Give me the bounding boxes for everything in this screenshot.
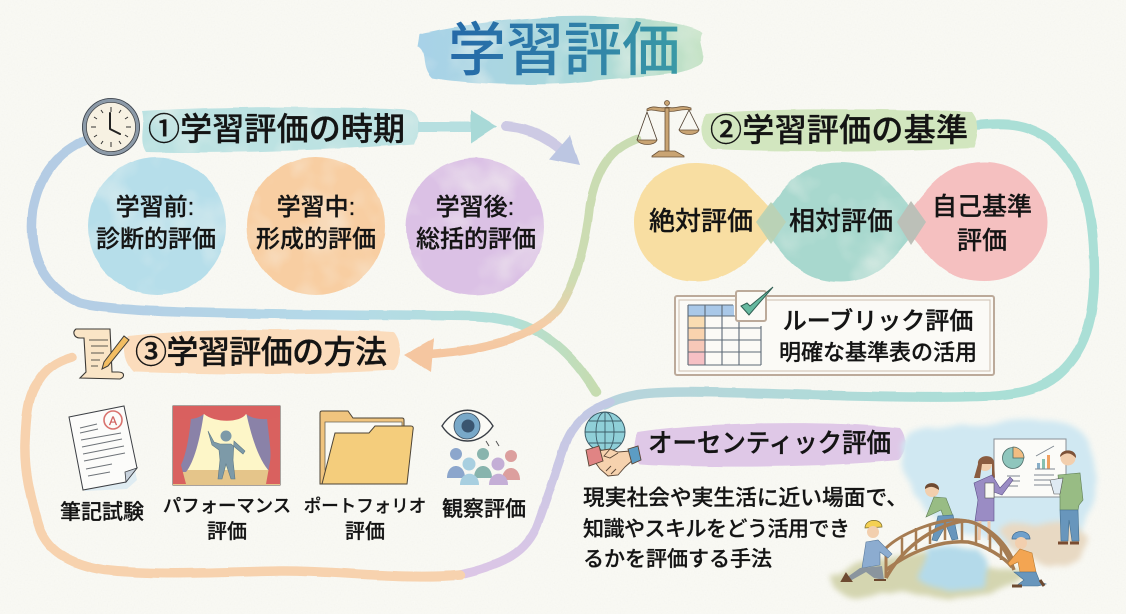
woman presenter bbox=[974, 456, 1013, 540]
venn: absolute: 絶対評価 bbox=[649, 206, 753, 236]
heading 3 text: ③学習評価の方法 bbox=[135, 334, 387, 370]
title: 学習評価 bbox=[448, 18, 680, 83]
method: portfolio bbox=[304, 411, 426, 543]
description bbox=[583, 485, 908, 571]
method: portfolio: ポートフォリオ bbox=[304, 496, 426, 516]
method: written test: A bbox=[109, 414, 117, 428]
arrow: teal bbox=[418, 110, 497, 143]
heading 1 text: ①学習評価の時期 bbox=[148, 111, 405, 147]
icon: scroll and pencil bbox=[74, 329, 129, 379]
bridge bbox=[886, 520, 1014, 578]
method: portfolio: 評価 bbox=[345, 520, 385, 543]
method: performance: 評価 bbox=[207, 520, 247, 543]
heading band 2 bbox=[701, 109, 978, 151]
ground bbox=[1005, 522, 1089, 566]
heading band 1 bbox=[142, 107, 420, 153]
method: written test: 筆記試験 bbox=[60, 501, 144, 524]
icon: scales bbox=[637, 100, 699, 157]
method: performance bbox=[163, 406, 291, 543]
section 4: authentic assessment bbox=[583, 412, 1094, 599]
method: observation: 観察評価 bbox=[442, 498, 526, 521]
sky wash bbox=[898, 419, 1094, 543]
method: written test bbox=[60, 406, 144, 524]
circle: before learning: 学習前: bbox=[116, 194, 194, 221]
venn: self-referenced: 評価 bbox=[957, 227, 1007, 255]
heading band 3 bbox=[124, 329, 400, 374]
worker on bridge bbox=[925, 483, 958, 541]
venn: absolute bbox=[634, 163, 786, 281]
venn: relative bbox=[756, 162, 926, 282]
circle: during learning: 学習中: bbox=[277, 194, 355, 221]
circle: after learning: 学習後: bbox=[436, 194, 514, 221]
section 3: methods bbox=[60, 329, 526, 543]
heading band 4 bbox=[634, 423, 905, 467]
circle: during learning: 形成的評価 bbox=[256, 226, 376, 253]
water bbox=[918, 548, 988, 590]
icon: handshake bbox=[586, 446, 641, 476]
icon: check box bbox=[736, 287, 773, 321]
illustration: bridge and workers bbox=[826, 419, 1094, 599]
method: observation bbox=[442, 410, 526, 521]
circle: after learning bbox=[406, 158, 544, 296]
flow path: orange loop bbox=[25, 357, 460, 576]
presentation board bbox=[994, 439, 1066, 497]
icon: rubric table bbox=[688, 305, 761, 365]
left worker bbox=[842, 520, 892, 581]
circle: after learning: 総括的評価 bbox=[416, 226, 536, 253]
circle: during learning bbox=[247, 157, 385, 295]
rubric box: ルーブリック評価 bbox=[783, 307, 973, 335]
venn: relative: 相対評価 bbox=[789, 206, 893, 236]
section 1: timing bbox=[82, 98, 580, 296]
venn: self-referenced bbox=[756, 162, 1047, 281]
icon: globe bbox=[585, 412, 625, 452]
description: 知識やスキルをどう活用でき bbox=[583, 518, 850, 541]
flow path: green to orange arrow bbox=[404, 139, 637, 372]
icon: clock bbox=[82, 98, 140, 156]
riverbank bbox=[826, 556, 1022, 599]
heading 2 text: ②学習評価の基準 bbox=[710, 112, 968, 148]
rubric box bbox=[675, 287, 994, 375]
section 2: criteria bbox=[634, 100, 1047, 375]
circle: before learning bbox=[88, 157, 226, 295]
man with clipboard bbox=[1050, 450, 1083, 543]
flow path: purple segment bbox=[454, 402, 610, 576]
flow path: blue to green bbox=[32, 140, 596, 392]
right worker bbox=[1008, 532, 1046, 586]
heading 4 text: オーセンティック評価 bbox=[648, 428, 891, 458]
arrow: purple bbox=[506, 126, 580, 165]
method: performance: パフォーマンス bbox=[163, 495, 291, 516]
description: 現実社会や実生活に近い場面で、 bbox=[583, 485, 908, 510]
flow path: teal outer loop bbox=[605, 124, 1094, 405]
venn: self-referenced: 自己基準 bbox=[932, 193, 1032, 221]
rubric box: 明確な基準表の活用 bbox=[779, 340, 977, 365]
circle: before learning: 診断的評価 bbox=[96, 226, 216, 253]
description: るかを評価する手法 bbox=[583, 548, 772, 571]
